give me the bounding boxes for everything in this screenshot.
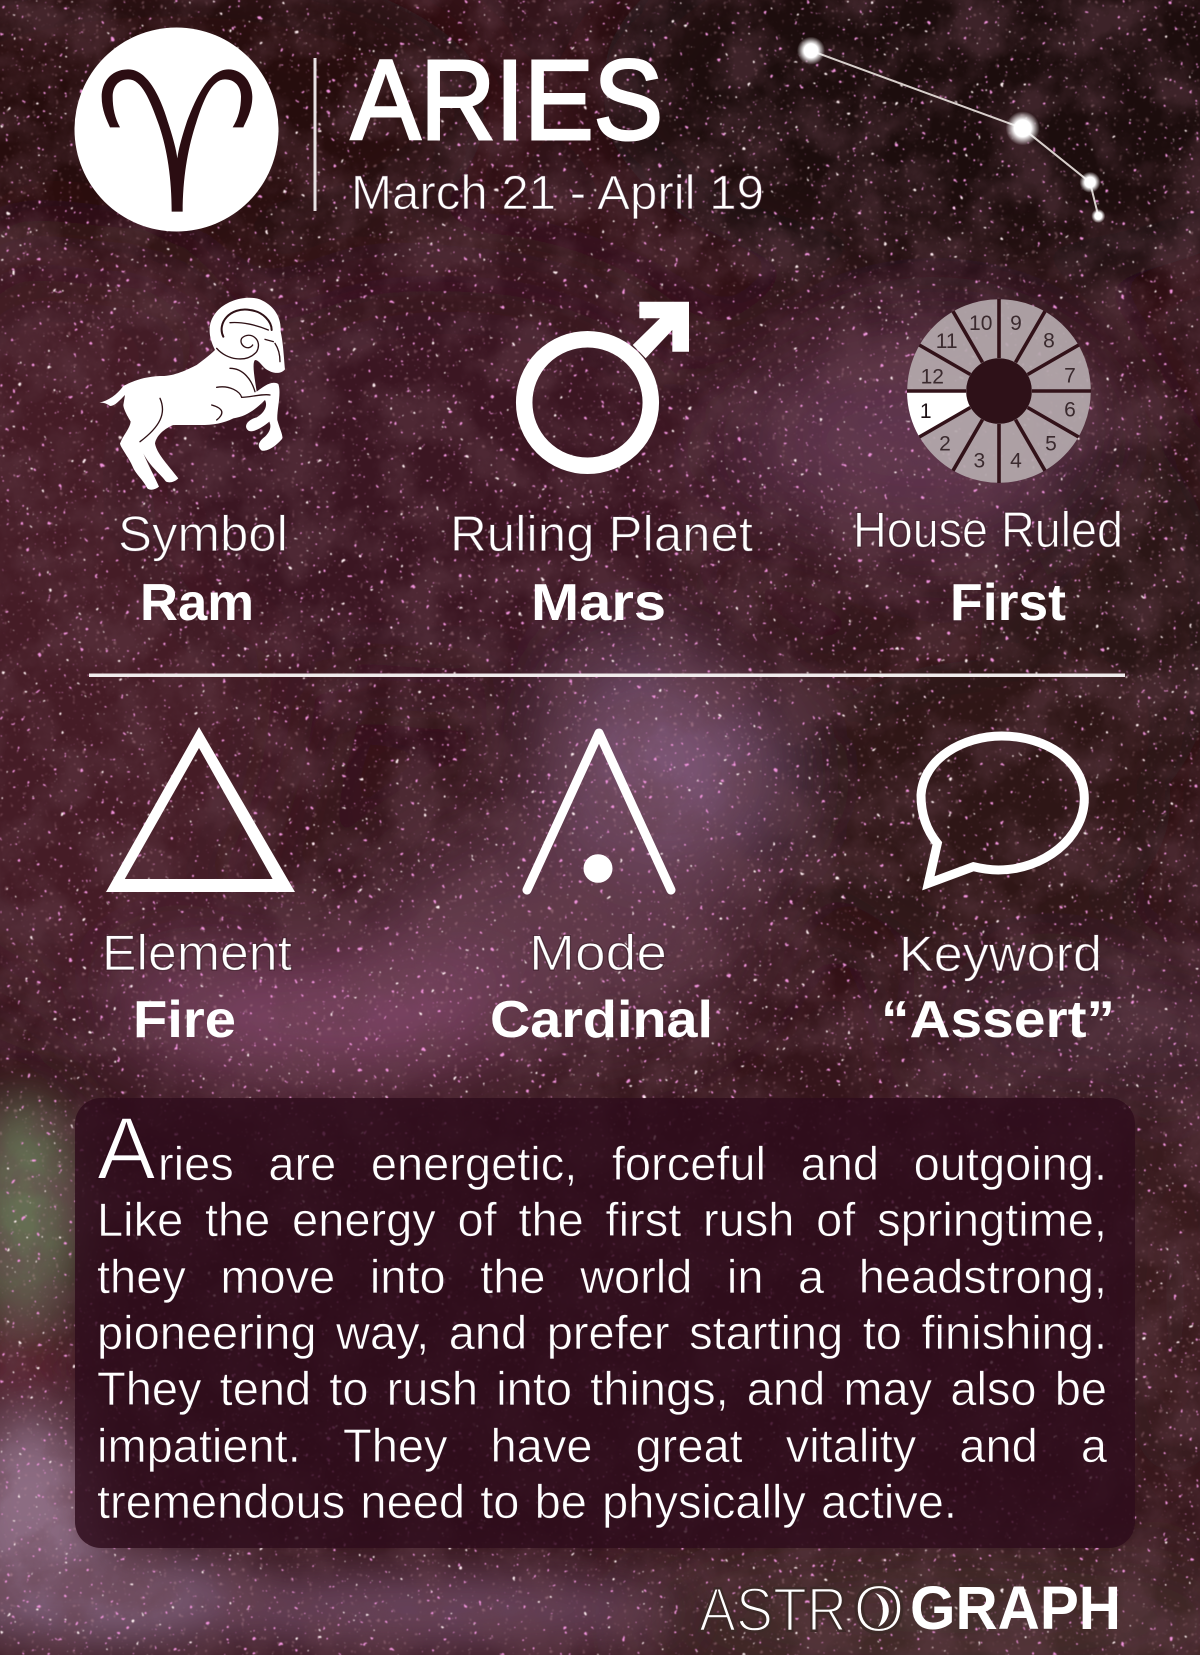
section divider bbox=[89, 674, 1125, 677]
description text line 6: impatient. They have great vitality and a bbox=[97, 1419, 1107, 1472]
icon: ram bbox=[99, 298, 285, 490]
logo: Astrograph: O bbox=[853, 1571, 905, 1647]
icon: house wheel: 11 bbox=[936, 330, 958, 353]
description text line 4: pioneering way, and prefer starting to finishing. bbox=[97, 1306, 1107, 1359]
logo: Astrograph: ASTR bbox=[699, 1576, 847, 1645]
value: Cardinal: Cardinal bbox=[490, 991, 713, 1049]
icon: Mars symbol bbox=[524, 302, 689, 466]
icon: Aries glyph in white circle bbox=[74, 28, 278, 232]
description text line 2: Like the energy of the first rush of springtime, bbox=[97, 1193, 1107, 1246]
title: ARIES: ARIES bbox=[351, 37, 663, 163]
icon: speech bubble bbox=[921, 736, 1084, 883]
label: House Ruled: House Ruled bbox=[853, 502, 1123, 558]
icon: fire triangle bbox=[106, 727, 295, 892]
icon: house wheel: 3 bbox=[973, 450, 985, 472]
description text line 5: They tend to rush into things, and may also be bbox=[97, 1362, 1107, 1415]
value: First: First bbox=[950, 574, 1066, 632]
icon: house wheel: 2 bbox=[939, 432, 951, 456]
label: Element: Element bbox=[102, 925, 292, 981]
icon: Aries constellation bbox=[797, 37, 1105, 223]
icon: house wheel bbox=[907, 299, 1091, 483]
label: Symbol: Symbol bbox=[118, 506, 288, 562]
header divider bbox=[314, 58, 316, 211]
icon: house wheel: 8 bbox=[1043, 330, 1055, 352]
description text line 1: ries are energetic, forceful and outgoing. bbox=[158, 1137, 1107, 1190]
logo: Astrograph: GRAPH bbox=[910, 1574, 1121, 1642]
icon: house wheel: 9 bbox=[1010, 312, 1022, 335]
icon: house wheel: 1 bbox=[920, 400, 932, 423]
label: Keyword: Keyword bbox=[899, 926, 1102, 982]
value: Ram: Ram bbox=[140, 574, 254, 632]
value: Mars: Mars bbox=[531, 574, 666, 632]
icon: house wheel: 6 bbox=[1064, 398, 1076, 422]
label: Mode: Mode bbox=[529, 925, 667, 981]
drop cap A: A bbox=[97, 1099, 156, 1198]
value: Fire: Fire bbox=[133, 991, 236, 1049]
icon: house wheel: 4 bbox=[1010, 450, 1022, 472]
label: Ruling Planet: Ruling Planet bbox=[450, 506, 753, 562]
description text line 3: they move into the world in a headstrong, bbox=[97, 1250, 1107, 1303]
description text line 7: tremendous need to be physically active. bbox=[97, 1475, 957, 1528]
icon: house wheel: 5 bbox=[1045, 432, 1057, 456]
date range: March 21 - April 19 bbox=[351, 167, 764, 220]
icon: house wheel: 12 bbox=[921, 366, 944, 388]
icon: house wheel: 10 bbox=[969, 312, 992, 335]
logo: Astrograph bbox=[699, 1571, 1121, 1647]
value: Assert: “Assert” bbox=[881, 991, 1115, 1049]
icon: house wheel: 7 bbox=[1064, 364, 1076, 388]
panel: description bbox=[75, 1098, 1135, 1548]
icon: cardinal mode bbox=[527, 733, 671, 890]
